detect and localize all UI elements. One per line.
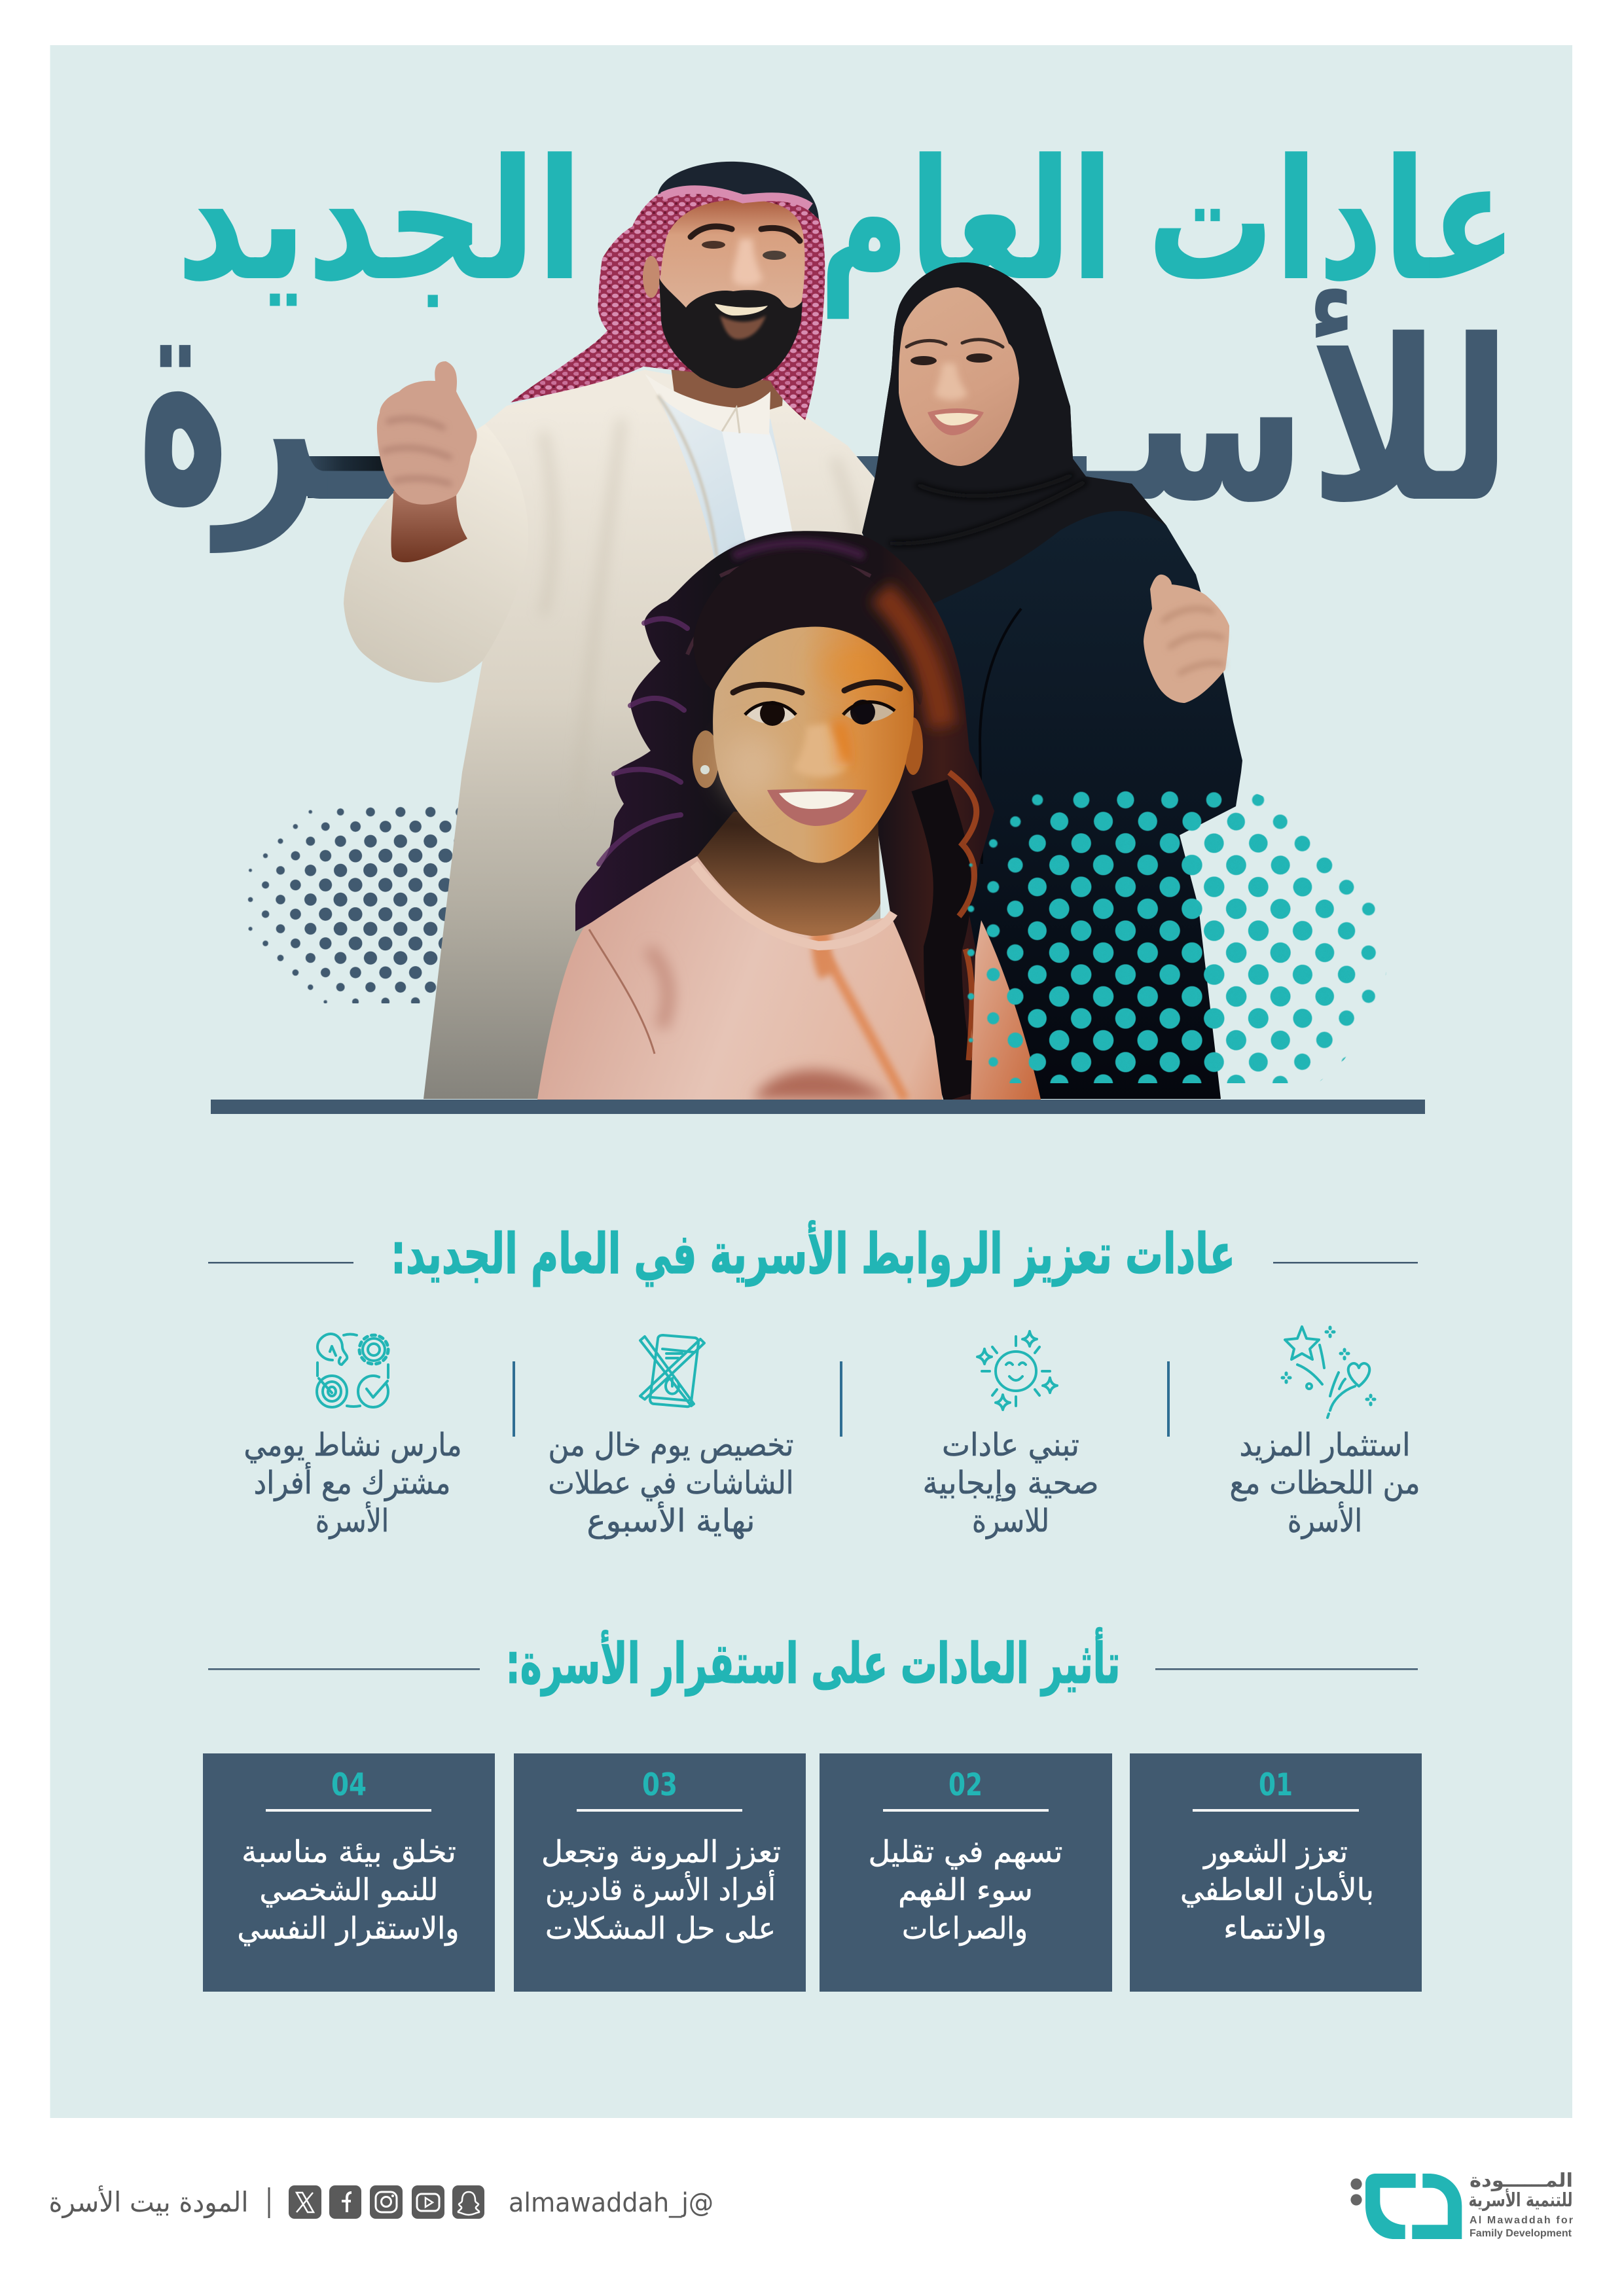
text: habit two: للاسرة bbox=[972, 1503, 1049, 1539]
text: habit one bbox=[1229, 1427, 1420, 1539]
text: habit four: الأسرة bbox=[316, 1501, 389, 1539]
icon: instagram bbox=[370, 2185, 403, 2219]
girl back hair bbox=[575, 531, 994, 1100]
title: line one: الجديد bbox=[176, 124, 583, 318]
girl neck bbox=[697, 812, 880, 936]
text: habit one: الأسرة bbox=[1288, 1501, 1362, 1539]
title: line two: للأ bbox=[1309, 287, 1512, 552]
card 04: للنمو الشخصي bbox=[259, 1872, 439, 1908]
card 03 bbox=[514, 1753, 806, 1992]
girl brows bbox=[733, 683, 900, 692]
logo bbox=[1350, 2169, 1573, 2239]
card 01: بالأمان العاطفي bbox=[1180, 1871, 1374, 1908]
title: line two bbox=[137, 221, 1512, 570]
card 01 bbox=[1130, 1753, 1422, 1992]
card 03: على حل المشكلات bbox=[545, 1910, 776, 1946]
text: habit three bbox=[549, 1427, 793, 1539]
mother smile bbox=[928, 408, 984, 435]
card 02: سوء الفهم bbox=[898, 1872, 1033, 1908]
girl front hair bbox=[693, 547, 923, 705]
girl face bbox=[713, 626, 914, 863]
text: habit three: تخصيص يوم خال من bbox=[549, 1427, 793, 1463]
card 02: 02 bbox=[948, 1767, 983, 1803]
heading: impact: تأثير العادات على استقرار الأسرة: bbox=[505, 1627, 1121, 1696]
father collar bbox=[645, 374, 770, 435]
photo: father bbox=[344, 162, 880, 1099]
logo text: Al Mawaddah for bbox=[1470, 2215, 1573, 2226]
text: habit four: مشترك مع أفراد bbox=[254, 1462, 450, 1501]
father fist bbox=[377, 361, 477, 505]
card 04: والاستقرار النفسي bbox=[237, 1910, 460, 1946]
father robe folds bbox=[543, 419, 871, 818]
father sleeve bbox=[344, 424, 528, 683]
icon: facebook bbox=[329, 2185, 361, 2219]
title: line one: العام bbox=[819, 124, 1113, 319]
father ear bbox=[643, 256, 660, 298]
card 02: والصراعات bbox=[902, 1910, 1028, 1946]
mother abaya opening bbox=[980, 609, 1021, 864]
girl eyes bbox=[746, 704, 795, 724]
father smile bbox=[715, 304, 768, 315]
father undershirt bbox=[658, 395, 805, 569]
card 02: تسهم في تقليل bbox=[868, 1834, 1063, 1870]
father face bbox=[660, 200, 805, 386]
halftone: navy dots bbox=[247, 806, 458, 1003]
father robe bbox=[424, 370, 880, 1099]
card 01: تعزز الشعور bbox=[1202, 1834, 1348, 1870]
girl shirt bbox=[537, 856, 1041, 1100]
photo: mother bbox=[862, 262, 1242, 1099]
mother abaya and hijab silhouette bbox=[862, 262, 1242, 1099]
footer: handle: almawaddah_j@ bbox=[509, 2188, 713, 2218]
mother fist bbox=[1144, 575, 1229, 703]
photo: girl bbox=[537, 531, 1041, 1100]
card 04: 04 bbox=[331, 1767, 367, 1803]
girl braid bbox=[929, 785, 962, 1096]
card 03: أفراد الأسرة قادرين bbox=[545, 1870, 776, 1908]
father neck bbox=[668, 340, 785, 419]
footer: slogan: المودة بيت الأسرة bbox=[48, 2185, 249, 2218]
footer: separator bbox=[268, 2187, 270, 2218]
logo text bbox=[1469, 2169, 1573, 2239]
girl collar bbox=[694, 864, 893, 946]
girl smile bbox=[767, 789, 867, 826]
text: habit one: من اللحظات مع bbox=[1229, 1465, 1420, 1501]
title: line one bbox=[176, 124, 1517, 319]
text: habit four: مارس نشاط يومي bbox=[244, 1427, 462, 1463]
card 04 bbox=[203, 1753, 495, 1992]
card 04: تخلق بيئة مناسبة bbox=[242, 1834, 456, 1870]
mother eyes bbox=[907, 340, 1003, 347]
father agal bbox=[658, 162, 819, 219]
icon: smiling sun bbox=[977, 1331, 1057, 1410]
logo dots bbox=[1350, 2178, 1362, 2190]
father forearm bbox=[391, 491, 467, 562]
text: habit one: استثمار المزيد bbox=[1240, 1427, 1410, 1463]
icon: x bbox=[289, 2185, 321, 2219]
halftone: teal dots bbox=[936, 789, 1394, 1083]
title: line two: سـ bbox=[1062, 293, 1307, 552]
logo text: المــــــودة bbox=[1470, 2169, 1573, 2191]
base bar bbox=[211, 1100, 1425, 1114]
girl ears bbox=[693, 730, 719, 788]
icon: activity grid bbox=[317, 1334, 388, 1407]
card 02 bbox=[820, 1753, 1112, 1992]
mother hijab drape bbox=[862, 262, 1166, 609]
icon: snapchat bbox=[452, 2185, 484, 2219]
card 01: والانتماء bbox=[1223, 1910, 1327, 1946]
girl hair curls bbox=[599, 619, 687, 864]
text: habit two: تبني عادات bbox=[942, 1427, 1079, 1463]
card 03: 03 bbox=[642, 1767, 677, 1803]
dividers bbox=[513, 1361, 1170, 1437]
father beard bbox=[659, 278, 803, 388]
text: habit four bbox=[244, 1427, 462, 1539]
logo mark bbox=[1365, 2174, 1416, 2239]
text: habit two bbox=[923, 1427, 1098, 1539]
icon: star and heart bbox=[1282, 1327, 1375, 1418]
logo text: Family Development bbox=[1470, 2228, 1572, 2239]
father headscarf bbox=[511, 187, 825, 420]
icon: youtube bbox=[412, 2185, 444, 2219]
title: line two: ة bbox=[137, 221, 229, 570]
title: line two: ـر bbox=[209, 293, 395, 554]
card 01: 01 bbox=[1259, 1767, 1293, 1803]
text: habit three: الشاشات في عطلات bbox=[549, 1465, 793, 1501]
girl nose bbox=[793, 723, 848, 777]
father eyes and brows bbox=[691, 226, 800, 241]
father scarf front band bbox=[662, 190, 810, 207]
title: line one: عادات bbox=[1147, 124, 1517, 318]
card 03: تعزز المرونة وتجعل bbox=[541, 1834, 781, 1870]
icon: phone crossed out bbox=[640, 1335, 704, 1407]
heading: habits: عادات تعزيز الروابط الأسرية في العام الجديد: bbox=[391, 1220, 1235, 1287]
text: habit three: نهاية الأسبوع bbox=[586, 1501, 755, 1539]
text: habit two: صحية وإيجابية bbox=[923, 1465, 1098, 1501]
mother face bbox=[899, 287, 1019, 466]
logo text: للتنمية الأسرية bbox=[1469, 2188, 1572, 2211]
